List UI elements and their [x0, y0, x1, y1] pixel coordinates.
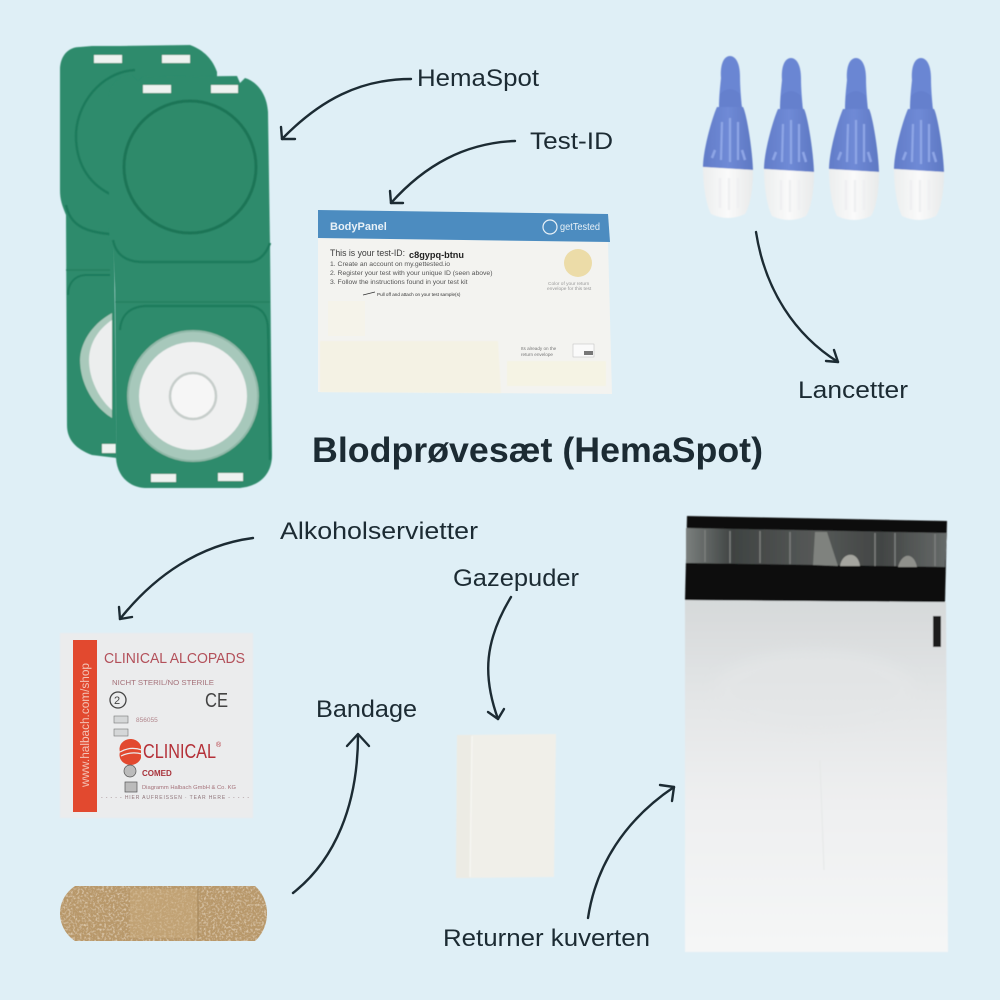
text: test ID: This is your test-ID: — [330, 248, 405, 259]
panel: alcohol wipe: 856055 — [136, 717, 158, 724]
panel: test-ID card: Color of your return — [548, 281, 590, 287]
panel: alcohol wipe: CLINICAL ALCOPADS — [104, 651, 245, 667]
icon: HemaSpot front cassette — [109, 75, 272, 488]
icon: bandage — [60, 886, 267, 941]
arrow: Alkoholservietter — [119, 538, 253, 619]
panel: test-ID card: return envelope — [521, 352, 553, 357]
icon: lid circle — [124, 101, 256, 233]
label: Gazepuder: Gazepuder — [453, 565, 579, 592]
arrow: Test-ID — [390, 141, 515, 203]
panel: alcohol wipe — [60, 633, 253, 818]
icon: lancets — [703, 56, 944, 220]
panel: alcohol wipe: NICHT STERIL/NO STERILE — [112, 678, 214, 687]
barcode mark — [933, 616, 941, 647]
label: Returner kuverten: Returner kuverten — [443, 925, 650, 952]
panel: alcohol wipe: - - - - - HIER AUFREISSEN · TEAR HERE - - - - - — [101, 795, 249, 801]
label: Test-ID: Test-ID — [530, 128, 613, 155]
arrow: Returner kuverten — [588, 785, 674, 918]
label: HemaSpot: HemaSpot — [417, 65, 539, 92]
red stripe — [73, 640, 97, 812]
panel: test-ID card: BodyPanel — [330, 221, 387, 233]
icon: no reuse — [110, 692, 126, 708]
arrow: Bandage — [293, 734, 369, 893]
icon: getTested logo — [543, 220, 557, 234]
panel: alcohol wipe: ® — [216, 741, 222, 749]
icon: clinical logo — [119, 739, 142, 765]
icon: gauze pad — [456, 734, 556, 878]
label: Alkoholservietter: Alkoholservietter — [280, 518, 478, 545]
icon: envelope colour dot — [564, 249, 592, 277]
text: instructions: 3. Follow the instructions found in your test kit — [330, 279, 468, 286]
arrow: Lancetter — [756, 232, 838, 362]
panel: test-ID card — [318, 210, 612, 394]
icon: no reuse: 2 — [114, 695, 120, 707]
icon: blood collection disc — [128, 331, 258, 461]
seal strip reflections — [705, 530, 935, 567]
label: Bandage: Bandage — [316, 696, 417, 723]
panel: alcohol wipe: Diagramm Halbach GmbH & Co. KG — [142, 785, 236, 791]
text: instructions — [330, 261, 492, 286]
title: Blodprøvesæt (HemaSpot) — [312, 431, 763, 470]
panel: test-ID card: getTested — [560, 221, 600, 233]
text: instructions: 2. Register your test with your unique ID (seen above) — [330, 270, 492, 277]
panel: alcohol wipe: CLINICAL — [143, 741, 216, 763]
label: Lancetter: Lancetter — [798, 377, 908, 404]
panel: test-ID card: Pull off and attach on your test sample(s) — [377, 292, 461, 297]
icon: HemaSpot back cassette — [60, 45, 217, 458]
icon: return envelope — [685, 516, 948, 952]
text: CE mark: CE — [205, 690, 228, 712]
panel: test-ID card: c8gypq-btnu — [409, 250, 464, 260]
panel: test-ID card: envelope for this test — [547, 286, 592, 292]
panel: alcohol wipe: www.halbach.com/shop — [80, 663, 92, 788]
panel: test-ID card: Its already on the — [521, 346, 557, 351]
panel: alcohol wipe: COMED — [142, 769, 172, 778]
arrow: Gazepuder — [488, 597, 511, 719]
text: instructions: 1. Create an account on my.gettested.io — [330, 261, 450, 268]
arrow: HemaSpot — [281, 79, 411, 139]
